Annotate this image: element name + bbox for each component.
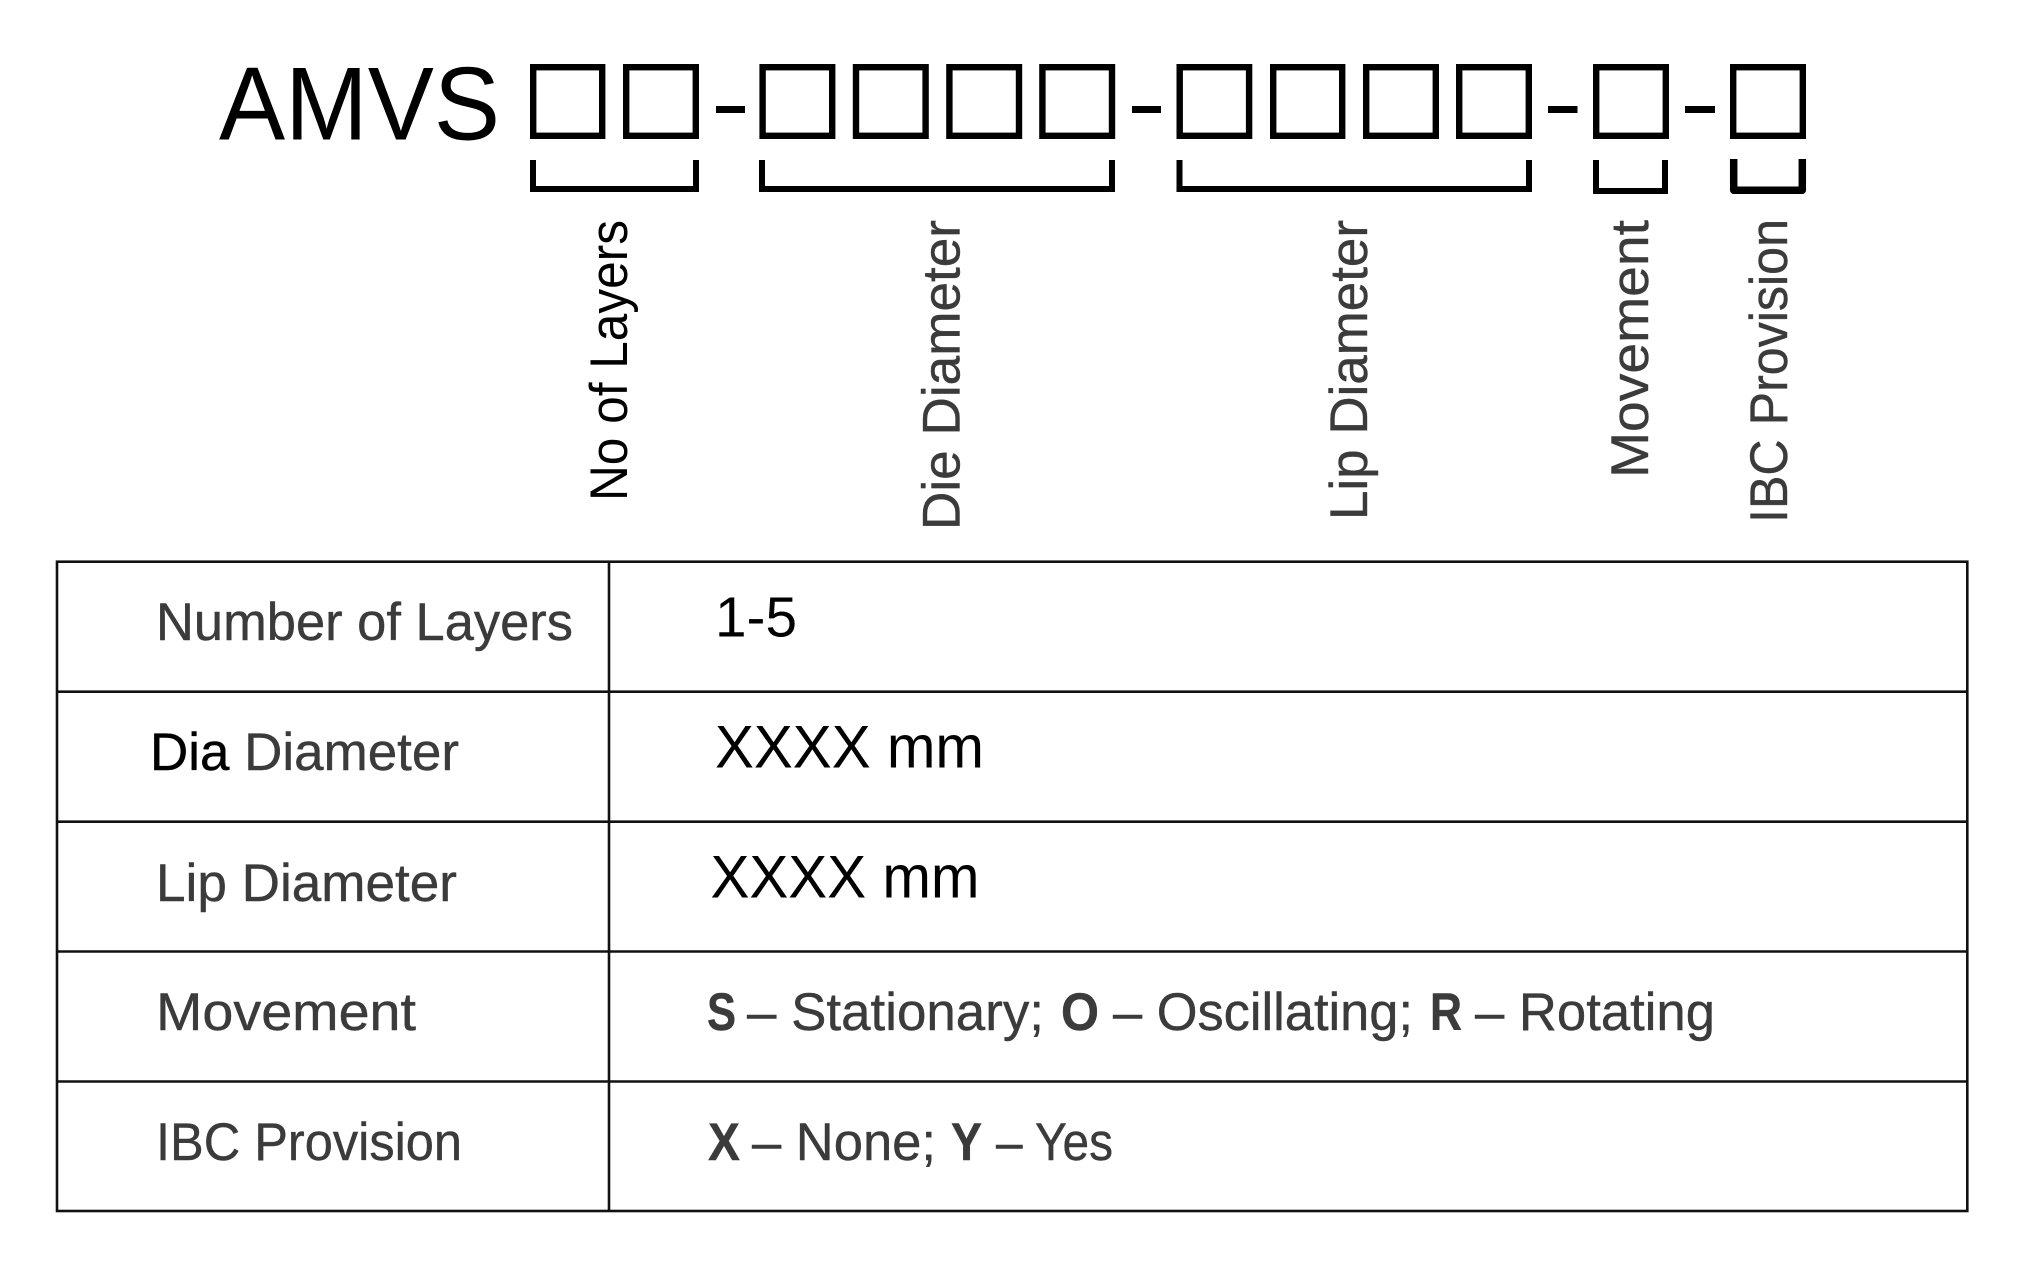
label: IBC Provision: IBC Provision	[1740, 219, 1799, 523]
brackets	[533, 159, 1802, 191]
row label: IBC Provision	[156, 1113, 462, 1172]
row: lip diameter	[156, 843, 980, 913]
label: Lip Diameter: Lip Diameter	[1320, 220, 1379, 520]
box: IBC provision	[1733, 67, 1803, 136]
row: dia diameter	[150, 713, 984, 782]
boxes: number of layers	[533, 67, 696, 136]
option X: – None;	[752, 1113, 936, 1172]
row label: Movement	[156, 983, 416, 1042]
row label: Number of Layers	[156, 593, 573, 652]
bracket: number of layers	[533, 160, 696, 189]
dash 2	[1132, 106, 1161, 113]
option R: R	[1430, 983, 1462, 1042]
bracket: movement	[1596, 160, 1665, 191]
row: number of layers	[156, 586, 797, 652]
box: movement	[1596, 67, 1666, 136]
option R: – Rotating	[1475, 983, 1715, 1042]
row label: Dia Diameter	[150, 723, 459, 782]
option X: X	[708, 1113, 740, 1172]
row value: 1-5	[715, 586, 797, 650]
dash 4	[1685, 106, 1715, 113]
dash 1	[716, 106, 745, 113]
option O: – Oscillating;	[1113, 983, 1413, 1042]
label: Movement: Movement	[1601, 220, 1660, 478]
option S: – Stationary;	[747, 983, 1044, 1042]
row value	[708, 1113, 1113, 1172]
boxes: lip diameter	[1180, 67, 1529, 136]
table grid	[57, 562, 1967, 1211]
boxes: die diameter	[763, 67, 1112, 136]
row value: XXXX mm	[710, 843, 980, 910]
code boxes	[533, 67, 1803, 136]
bracket: IBC provision	[1734, 159, 1802, 190]
label: No of Layers: No of Layers	[580, 220, 639, 501]
vertical labels	[580, 219, 1799, 530]
bracket: die diameter	[762, 160, 1112, 189]
row: IBC provision	[156, 1113, 1113, 1172]
bracket: lip diameter	[1180, 160, 1529, 189]
option Y	[951, 1113, 1113, 1172]
row value: XXXX mm	[715, 713, 984, 780]
option O: O	[1061, 983, 1099, 1042]
option Y: Y	[951, 1113, 982, 1172]
row: movement	[156, 983, 1715, 1042]
dash 3	[1548, 106, 1578, 113]
option Y: – Yes	[996, 1113, 1113, 1172]
specification table	[57, 562, 1967, 1211]
row label: Lip Diameter	[156, 854, 457, 913]
option S: S	[707, 983, 736, 1042]
row value	[707, 983, 1715, 1042]
title: AMVS prefix: AMVS	[219, 46, 500, 162]
label: Die Diameter: Die Diameter	[912, 220, 971, 530]
